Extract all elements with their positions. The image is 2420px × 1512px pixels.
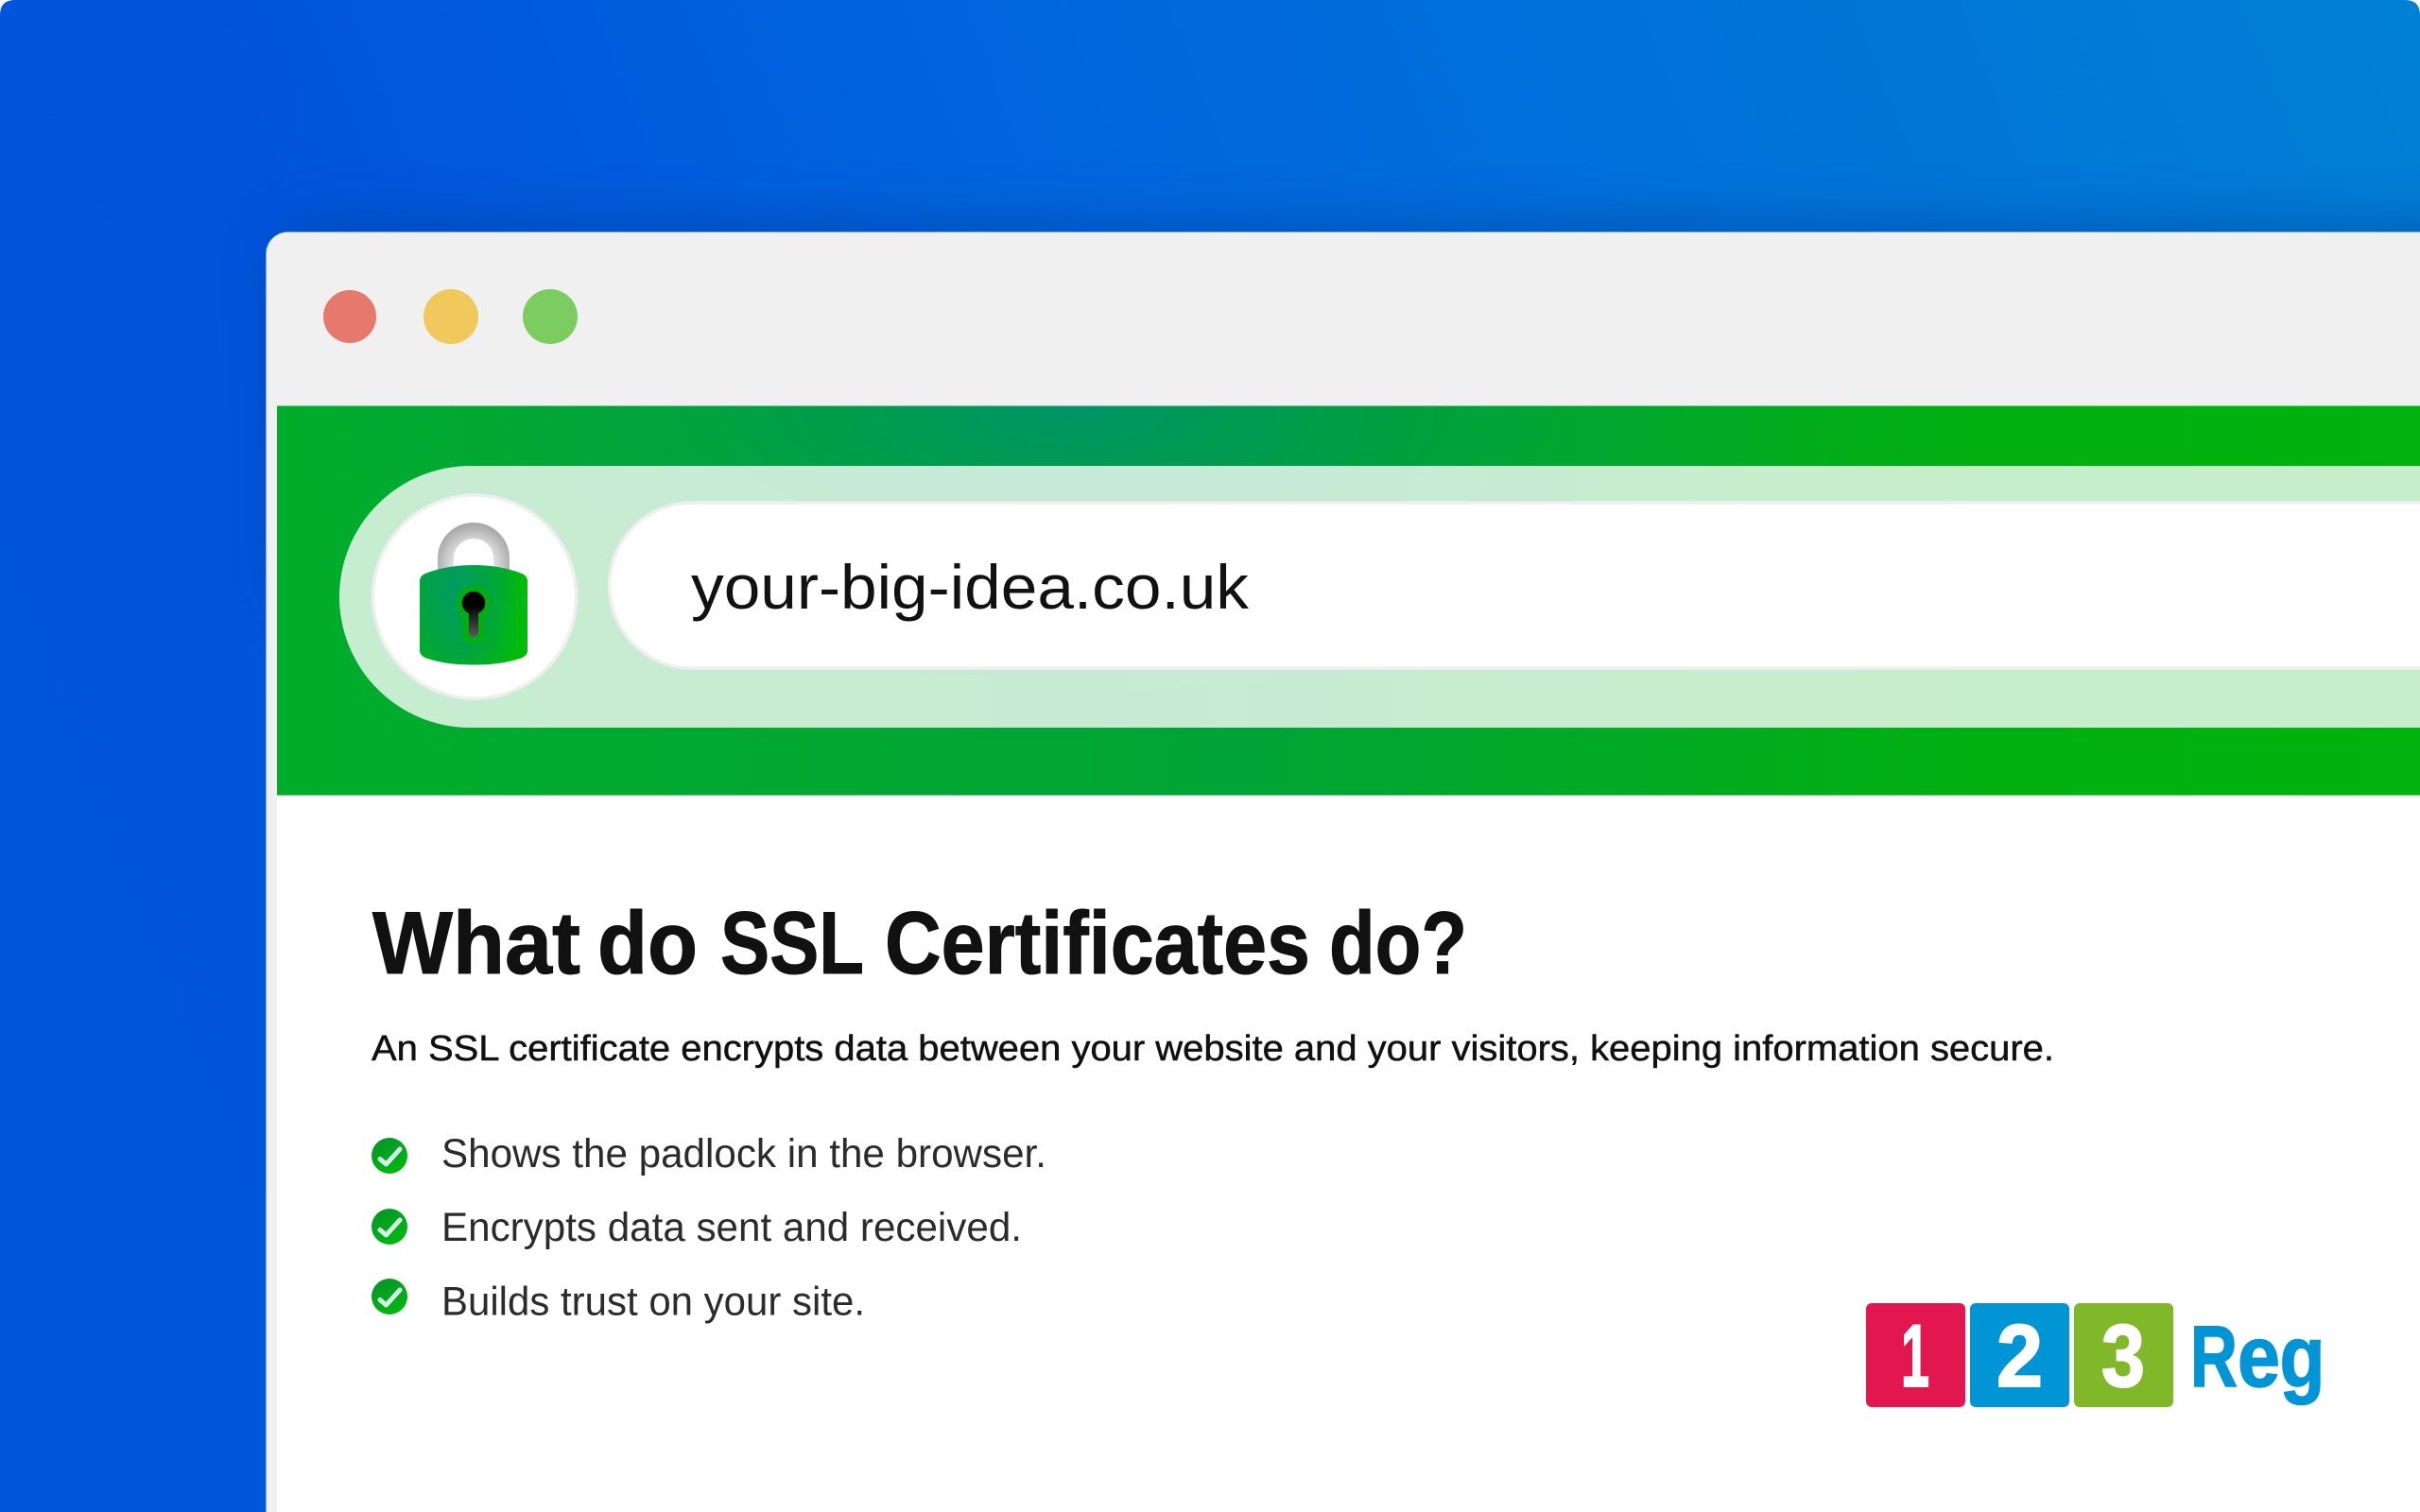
- checklist item 3: Builds trust on your site.: [441, 1280, 865, 1325]
- icon: keyhole: [456, 585, 492, 644]
- logo wordmark: [2190, 1309, 2325, 1405]
- 123 Reg logo: [1866, 1303, 2325, 1407]
- title: do: [597, 893, 698, 992]
- green address banner: [277, 406, 2420, 796]
- logo square 2: 2: [1996, 1306, 2043, 1405]
- window shadow: [284, 227, 2420, 605]
- checklist item 1: Shows the padlock in the browser.: [441, 1131, 1046, 1177]
- title: do?: [1329, 893, 1467, 992]
- title: SSL: [720, 893, 864, 992]
- icon: padlock body: [420, 565, 527, 665]
- checklist item 2: Encrypts data sent and received.: [441, 1205, 1022, 1250]
- browser window: [266, 232, 2420, 1512]
- window controls: [323, 289, 578, 344]
- title: Certificates: [885, 893, 1310, 992]
- url text: your-big-idea.co.uk: [691, 552, 1250, 622]
- padlock badge: [372, 495, 577, 698]
- logo square 3: [2074, 1303, 2173, 1407]
- subtitle: An SSL certificate encrypts data between your website and your visitors, keeping information secure.: [372, 1029, 2054, 1069]
- logo square 1: [1866, 1303, 1965, 1407]
- title: What: [372, 893, 580, 992]
- title: [372, 893, 1467, 992]
- icon: padlock shackle: [446, 531, 501, 578]
- checklist: [372, 1131, 1046, 1325]
- logo square 3: 3: [2101, 1306, 2145, 1405]
- logo wordmark: e: [2238, 1309, 2280, 1405]
- logo wordmark: R: [2190, 1309, 2238, 1405]
- logo wordmark: g: [2280, 1309, 2325, 1405]
- address bar pill: [339, 466, 2420, 728]
- url input field: [609, 503, 2420, 668]
- logo square 2: [1970, 1303, 2069, 1407]
- logo square 1: 1: [1901, 1306, 1929, 1405]
